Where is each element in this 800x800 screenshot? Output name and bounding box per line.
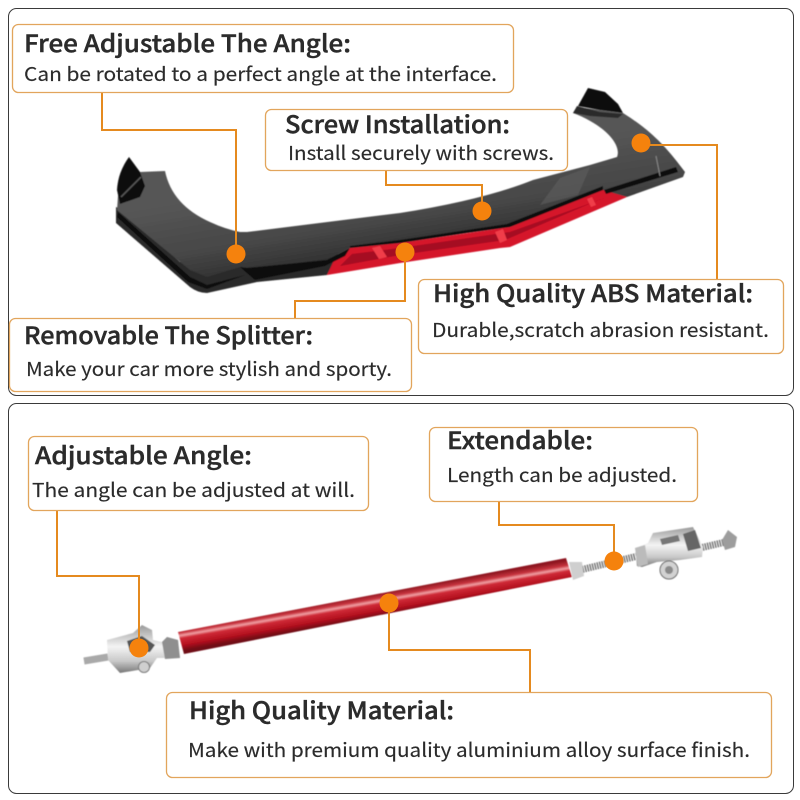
glossy main body (117, 107, 685, 277)
callout: extendable: Extendable: (447, 421, 593, 456)
black lower trim (240, 167, 678, 280)
callout: adjustable angle: Adjustable Angle: (35, 436, 252, 471)
callout: removable splitter: Removable The Splitter: (24, 316, 313, 351)
callout: screw installation: Screw Installation: (285, 105, 510, 140)
panel: front splitter (8, 8, 794, 396)
callout: high quality material: High Quality Material: (189, 691, 454, 726)
lower black lip (116, 207, 340, 293)
threaded rods (84, 657, 108, 661)
strut rod product image (84, 527, 737, 673)
callout: high quality ABS: Durable,scratch abrasion resistant. (432, 316, 769, 343)
callout: free adjustable: Can be rotated to a perfect angle at the interface. (24, 60, 497, 87)
right fin (578, 88, 623, 113)
right clevis (635, 527, 703, 567)
red splitter blade (327, 189, 627, 275)
callout: removable splitter (10, 242, 414, 392)
callout: screw installation: Install securely with screws. (288, 139, 554, 166)
callout: extendable (430, 421, 698, 570)
callout: screw installation (266, 105, 568, 220)
callout: removable splitter: Make your car more stylish and sporty. (26, 355, 392, 382)
callout: free adjustable (12, 24, 514, 264)
panel: strut rod (8, 404, 794, 794)
red tube (178, 558, 572, 654)
callout: high quality ABS (418, 134, 784, 354)
splitter product image (116, 88, 685, 293)
callout: high quality material: Make with premium quality aluminium alloy surface finish. (188, 736, 750, 763)
left clevis (107, 625, 180, 673)
right nut and bolt head (722, 530, 737, 550)
gloss highlights (540, 167, 590, 205)
callout: high quality ABS: High Quality ABS Material: (433, 274, 753, 309)
left fin (117, 157, 145, 204)
callout: free adjustable: Free Adjustable The Angle: (24, 24, 351, 59)
callout: adjustable angle: The angle can be adjusted at will. (32, 476, 355, 503)
callout: high quality material (166, 594, 772, 778)
callout: adjustable angle (28, 436, 368, 658)
callout: extendable: Length can be adjusted. (447, 461, 677, 488)
